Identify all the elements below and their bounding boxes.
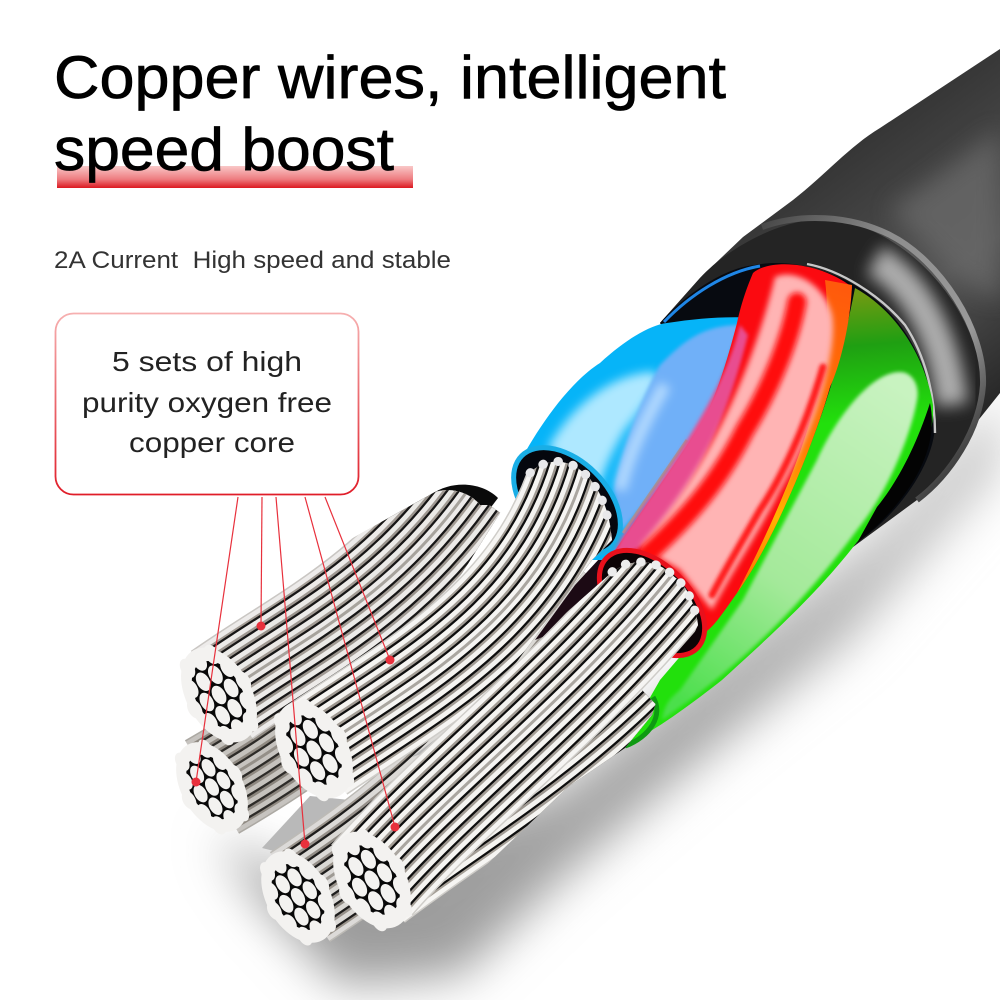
- green highlight: [662, 372, 918, 720]
- cable drop shadow: [215, 395, 1000, 985]
- end face right: [315, 817, 429, 943]
- red sleeve: [580, 264, 852, 675]
- leader lines and dots: [192, 497, 400, 848]
- grey notch between bundles: [412, 710, 474, 757]
- callout box: [56, 314, 358, 494]
- end face bottom: [244, 837, 352, 957]
- opening silver edge: [807, 264, 935, 433]
- strand bundle into red sleeve: [372, 575, 672, 880]
- strand bundle centre: [317, 468, 585, 750]
- blue periwinkle band: [614, 325, 740, 530]
- end face lower left: [159, 728, 265, 846]
- centre strand tips: [530, 461, 609, 525]
- end face centre: [257, 687, 371, 813]
- black cable jacket: [660, 49, 1000, 547]
- strand bundle upper left: [222, 490, 468, 695]
- green rim: [625, 697, 657, 746]
- strand bundle bottom front: [300, 590, 610, 897]
- subtitle: 2A Current High speed and stable: [54, 247, 451, 274]
- orange side strip: [737, 280, 852, 593]
- callout text: [82, 346, 332, 458]
- title: speed boost: [54, 116, 394, 183]
- red centre stripe: [650, 302, 797, 552]
- red pale highlight: [640, 275, 833, 610]
- collar ring: [762, 218, 983, 500]
- grey strip beside blue: [623, 440, 687, 533]
- pink side band: [610, 325, 748, 560]
- black socket of back core: [432, 485, 498, 535]
- green sleeve: [623, 288, 933, 746]
- blue pale stripe: [620, 385, 665, 490]
- callout text: purity oxygen free: [82, 387, 332, 418]
- grey shadow between bundles: [262, 796, 350, 855]
- wire end faces: [159, 633, 429, 957]
- strand bundle into green sleeve: [372, 680, 632, 880]
- red sleeve opening: [580, 531, 724, 675]
- callout text: 5 sets of high: [112, 346, 302, 377]
- right strand tips: [612, 562, 697, 622]
- end face upper left: [163, 633, 275, 757]
- strand bundle lower left: [212, 700, 340, 787]
- black gap beside green: [857, 403, 932, 543]
- blue sleeve: [493, 317, 760, 575]
- red right stripe: [712, 367, 823, 595]
- blue back edge inside opening: [664, 266, 760, 322]
- title: [54, 44, 726, 188]
- dark gap between cores: [535, 545, 612, 640]
- title: Copper wires, intelligent: [54, 44, 726, 111]
- highlight bar under second line: [57, 166, 413, 188]
- collar highlight: [875, 260, 952, 405]
- callout text: copper core: [129, 427, 295, 458]
- dark opening of the cable: [660, 263, 935, 545]
- blue light highlight: [548, 372, 658, 488]
- blue sleeve opening: [493, 427, 641, 575]
- collar band: [660, 219, 983, 547]
